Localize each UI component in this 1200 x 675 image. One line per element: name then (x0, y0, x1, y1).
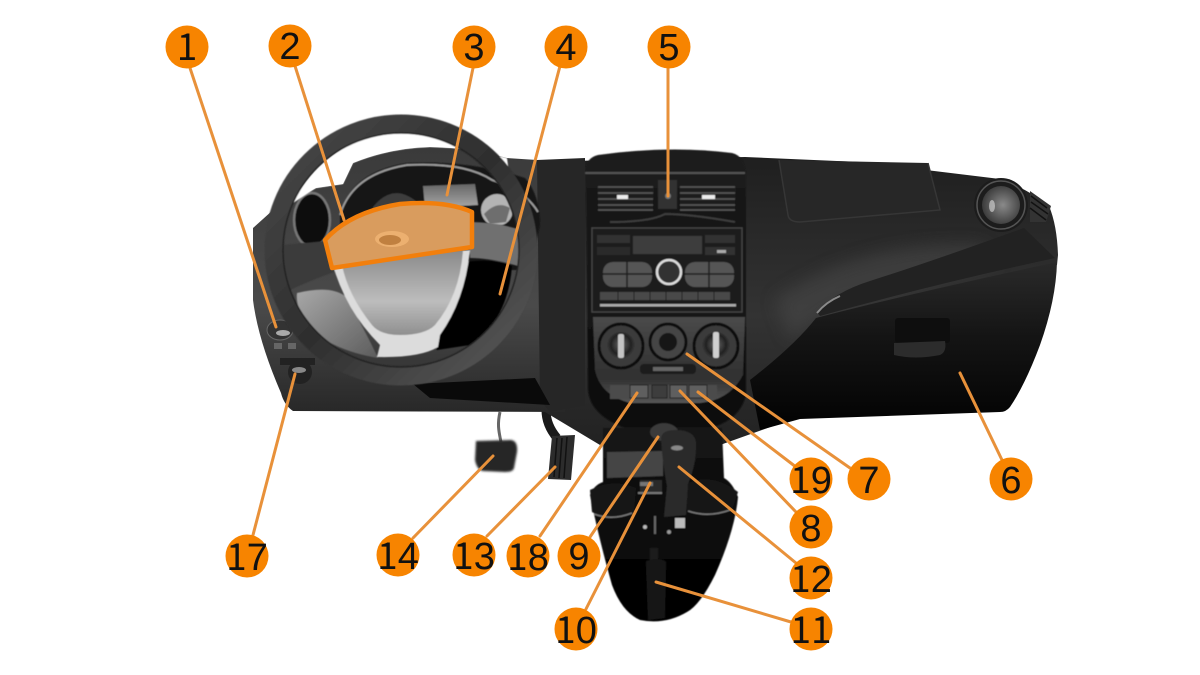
shifter base (623, 508, 691, 548)
cup holders (590, 480, 738, 517)
knob: fan (599, 324, 643, 368)
right column trim (537, 158, 585, 412)
emblem on airbag (375, 231, 409, 247)
callout 4: 4 (555, 27, 577, 69)
callout 3 (452, 26, 496, 69)
callout 12: 12 (790, 549, 832, 603)
pedal: brake (475, 412, 517, 472)
gear knob (650, 423, 696, 517)
right gauge (481, 194, 513, 226)
left gauge (373, 193, 417, 210)
central air vents (585, 172, 745, 222)
dark left spoke (283, 240, 340, 292)
callout 1 (166, 17, 208, 71)
callout 14: 14 (377, 526, 419, 580)
callout 11: 11 (790, 600, 832, 654)
handbrake (646, 548, 666, 620)
instrument cluster behind wheel (294, 163, 540, 270)
callout 6 (990, 458, 1032, 502)
lower left trim (413, 378, 550, 405)
dashboard body (253, 147, 1058, 445)
climate control panel (593, 317, 745, 403)
center tunnel console (590, 423, 738, 621)
storage tray (607, 451, 663, 478)
callout 9 (558, 534, 600, 578)
center stack (585, 149, 746, 428)
callout 6: 6 (1000, 460, 1022, 502)
callout 5: 5 (658, 27, 680, 69)
pedal: accelerator (546, 410, 575, 480)
callout 19: 19 (790, 450, 832, 504)
callout 17: 17 (226, 527, 268, 581)
callout 9: 9 (568, 536, 590, 578)
knob: temperature (694, 324, 738, 368)
steering wheel (274, 124, 528, 376)
callout 3: 3 (463, 27, 485, 69)
callout 8: 8 (800, 508, 822, 550)
callout 2 (268, 24, 312, 68)
callout 4 (544, 26, 588, 69)
passenger airbag outline (779, 160, 940, 222)
left switch cluster (267, 320, 315, 384)
left dash (253, 147, 565, 412)
callout 7: 7 (858, 460, 880, 502)
callout 5 (648, 26, 690, 69)
right air vent (974, 178, 1051, 232)
glove box (750, 262, 1057, 430)
glove box handle (894, 318, 950, 358)
callout 7 (848, 458, 890, 502)
callout 18: 18 (507, 527, 549, 581)
rim (274, 124, 528, 376)
soft highlight on upper panel (775, 245, 1000, 340)
right spoke (470, 222, 527, 266)
airbag highlight overlay (325, 203, 472, 268)
callout 8 (790, 506, 832, 550)
radio (592, 228, 742, 312)
hub airbag (342, 250, 463, 335)
leader lines (190, 66, 1002, 622)
lit left spoke (297, 290, 378, 358)
switch row (610, 385, 717, 399)
center gauge (423, 184, 478, 208)
callout 1: 1 (177, 17, 197, 71)
callout 10: 10 (555, 600, 597, 654)
white gap above binnacle (290, 131, 510, 205)
glove box crease (817, 228, 1055, 316)
knob: mode (650, 324, 686, 360)
lower black opening (434, 261, 512, 350)
left air vent (294, 193, 330, 247)
callout 13: 13 (453, 526, 495, 580)
hub chrome (332, 250, 470, 357)
right upper panel (530, 157, 1058, 445)
callout 2: 2 (279, 26, 301, 68)
